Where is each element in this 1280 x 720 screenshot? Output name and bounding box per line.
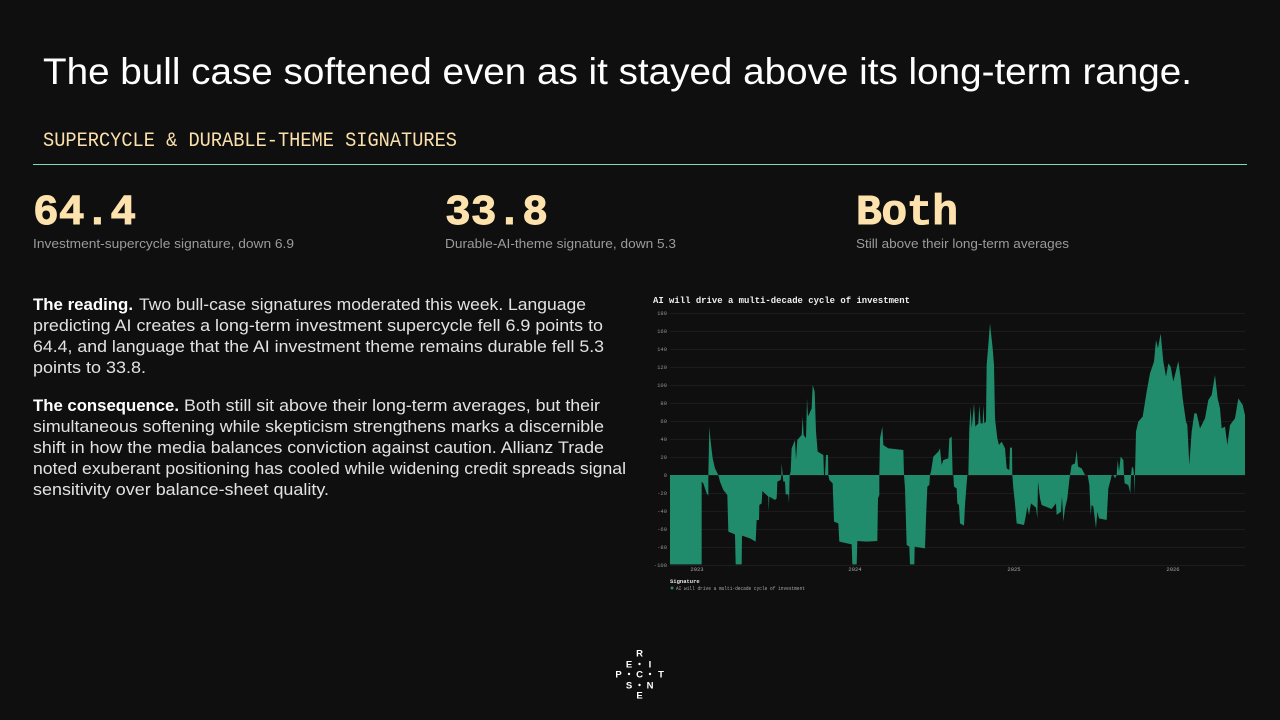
text block: the reading: The reading. (33, 296, 133, 314)
text block: the consequence: noted exuberant positioning has cooled while widening credit spreads signal (33, 460, 626, 478)
text block: the reading: predicting AI creates a long-term investment supercycle fell 6.9 points to (33, 317, 603, 335)
metric: both above averages: Still above their long-term averages (856, 236, 1070, 251)
logo: letter compass: T (658, 670, 664, 680)
text block: the consequence: Both still sit above their long-term averages, but their (184, 397, 601, 415)
panel: key metrics (33, 188, 1070, 251)
section heading: SUPERCYCLE & DURABLE-THEME SIGNATURES (43, 130, 457, 153)
area series (670, 323, 1245, 564)
text block: the reading: points to 33.8. (33, 359, 146, 377)
y axis gridlines and labels: -80 (657, 544, 667, 551)
metric: durable AI theme (445, 188, 676, 251)
x axis year labels: 2026 (1166, 566, 1180, 573)
legend (670, 578, 805, 592)
logo: letter compass: S (626, 680, 632, 692)
text block: the reading: 64.4, and language that the AI investment theme remains durable fell 5.3 (33, 338, 604, 356)
x axis year labels (690, 566, 1180, 573)
legend: AI will drive a multi-decade cycle of investment (676, 585, 805, 592)
metric: durable AI theme: 33.8 (445, 188, 548, 237)
metric: both above averages: Both (856, 188, 958, 237)
metric: both above averages (856, 188, 1070, 251)
y axis gridlines and labels (654, 310, 1245, 569)
logo: letter compass: P (615, 670, 622, 680)
logo: letter compass (615, 648, 664, 702)
legend: Signature (670, 578, 700, 585)
y axis gridlines and labels: 0 (664, 472, 667, 479)
text block: the reading: Two bull-case signatures moderated this week. Language (139, 296, 586, 314)
y axis gridlines and labels: -60 (657, 526, 667, 533)
logo: letter compass: C (636, 670, 643, 680)
x axis year labels: 2023 (690, 566, 704, 573)
text block: the consequence: sensitivity over balance-sheet quality. (33, 481, 329, 499)
y axis gridlines and labels: 160 (657, 328, 667, 335)
text block: the consequence: simultaneous softening while skepticism strengthens marks a discernible (33, 418, 604, 436)
metric: investment supercycle: 64.4 (33, 188, 136, 237)
y axis gridlines and labels: 20 (660, 454, 667, 461)
x axis year labels: 2024 (848, 566, 862, 573)
y axis gridlines and labels: 120 (657, 364, 667, 371)
chart: multi-decade investment signature (653, 296, 1245, 592)
title: The bull case softened even as it stayed above its long-term range. (43, 51, 1192, 92)
y axis gridlines and labels: -20 (657, 490, 667, 497)
logo: letter compass: I (649, 660, 651, 670)
x axis year labels: 2025 (1007, 566, 1021, 573)
text block: the consequence (33, 397, 626, 499)
logo: letter compass: E (626, 660, 632, 670)
logo: letter compass: E (636, 690, 643, 702)
y axis gridlines and labels: -100 (654, 562, 667, 569)
y axis gridlines and labels: 140 (657, 346, 667, 353)
y axis gridlines and labels: 180 (657, 310, 667, 317)
metric: durable AI theme: Durable-AI-theme signature, down 5.3 (445, 236, 676, 251)
text block: the reading (33, 296, 604, 377)
metric: investment supercycle (33, 188, 294, 251)
y axis gridlines and labels: 80 (660, 400, 667, 407)
text block: the consequence: shift in how the media balances conviction against caution. Allianz Trade (33, 439, 604, 457)
chart title: AI will drive a multi-decade cycle of investment (653, 296, 910, 306)
y axis gridlines and labels: 60 (660, 418, 667, 425)
logo: letter compass: R (636, 648, 643, 660)
metric: investment supercycle: Investment-supercycle signature, down 6.9 (33, 236, 294, 251)
y axis gridlines and labels: 40 (660, 436, 667, 443)
y axis gridlines and labels: -40 (657, 508, 667, 515)
logo: letter compass: N (647, 680, 654, 692)
y axis gridlines and labels: 100 (657, 382, 667, 389)
text block: the consequence: The consequence. (33, 397, 179, 415)
